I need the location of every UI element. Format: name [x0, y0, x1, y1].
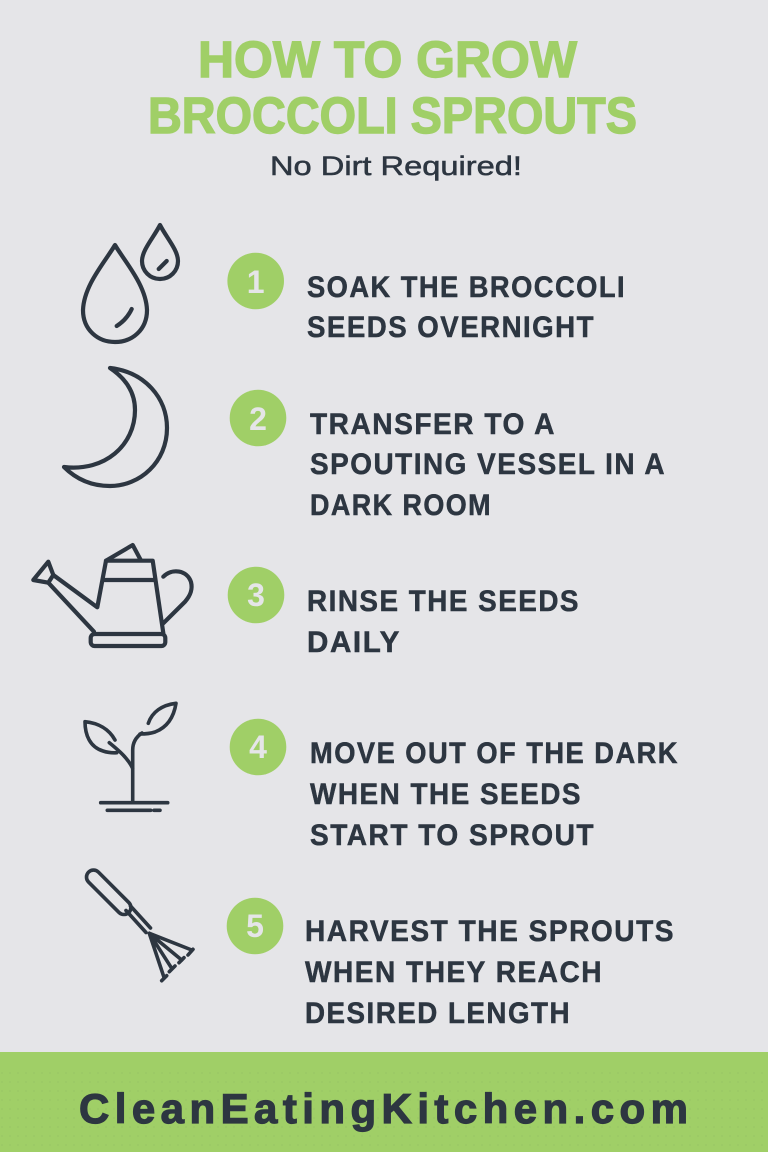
step 4 text: WHEN THE SEEDS — [310, 778, 582, 811]
title: HOW TO GROW — [198, 31, 578, 88]
step 5 text: DESIRED LENGTH — [305, 997, 571, 1030]
step 5 text: HARVEST THE SPROUTS — [305, 915, 675, 948]
step 4 text: MOVE OUT OF THE DARK — [310, 737, 679, 770]
step 4 number badge — [230, 719, 286, 775]
title: BROCCOLI SPROUTS — [148, 87, 637, 144]
footer website text: CleanEatingKitchen.com — [79, 1085, 688, 1132]
step 5 text — [305, 915, 675, 1030]
icon: watering can — [33, 545, 192, 646]
step 4 text — [310, 737, 679, 852]
step 3 text — [307, 585, 580, 659]
icon: garden rake — [84, 867, 193, 981]
step 3 number badge: 3 — [247, 577, 265, 613]
step 2 number badge: 2 — [249, 401, 267, 437]
step 4 text: START TO SPROUT — [310, 819, 595, 852]
icon: water drops — [83, 225, 178, 342]
step 4 number badge: 4 — [249, 729, 267, 765]
step 2 text: TRANSFER TO A — [310, 408, 556, 441]
step 3 text: DAILY — [307, 626, 401, 659]
step 5 number badge — [227, 898, 283, 954]
step 2 text — [310, 408, 666, 522]
step 5 number badge: 5 — [246, 908, 264, 944]
step 2 text: SPOUTING VESSEL IN A — [310, 448, 666, 481]
title — [148, 31, 637, 144]
icon: crescent moon — [64, 368, 167, 486]
step 3 text: RINSE THE SEEDS — [307, 585, 580, 618]
step 1 number badge: 1 — [247, 264, 265, 300]
icon: seedling — [85, 703, 176, 810]
step 1 text — [307, 271, 626, 344]
step 5 text: WHEN THEY REACH — [305, 956, 603, 989]
step 3 number badge — [228, 567, 284, 623]
step 1 text: SOAK THE BROCCOLI — [307, 271, 626, 304]
step 1 number badge — [227, 253, 284, 309]
step 2 number badge — [230, 390, 286, 446]
subtitle: No Dirt Required! — [270, 151, 522, 181]
step 2 text: DARK ROOM — [310, 489, 492, 522]
step 1 text: SEEDS OVERNIGHT — [307, 311, 595, 344]
footer banner — [0, 1052, 768, 1152]
